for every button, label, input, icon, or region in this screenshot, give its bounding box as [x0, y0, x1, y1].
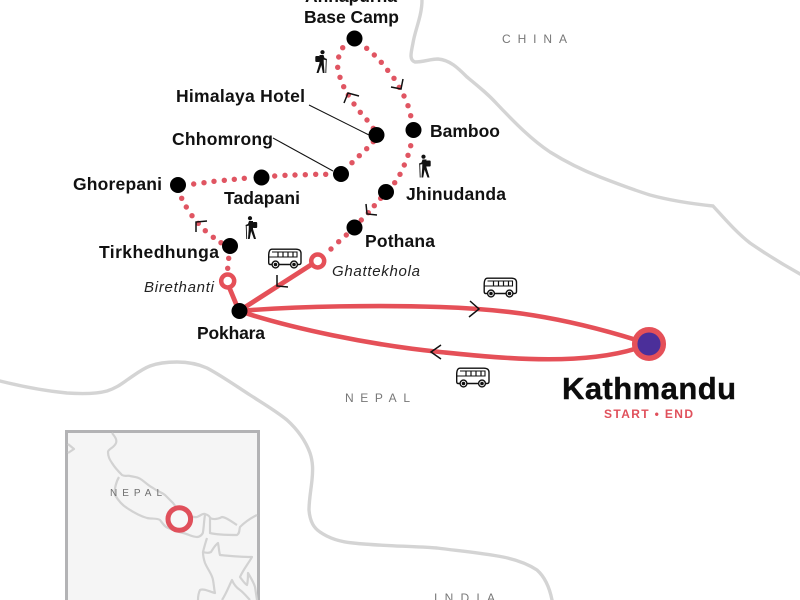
inset label: Nepal: NEPAL — [110, 488, 162, 499]
label: Jhinudanda: Jhinudanda — [406, 184, 506, 204]
label: Ghorepani: Ghorepani — [73, 174, 162, 194]
border: China — [411, 0, 800, 274]
label: Chhomrong: Chhomrong — [172, 129, 273, 149]
inset locator map — [66, 432, 258, 600]
label: Himalaya Hotel: Himalaya Hotel — [176, 86, 305, 106]
icon: bus 2 — [484, 278, 516, 297]
drive route: Pokhara to Kathmandu and back — [227, 261, 649, 359]
icon: hiker 1 — [315, 50, 327, 73]
label: Pokhara: Pokhara — [197, 323, 265, 343]
stop: Ghattekhola — [311, 254, 324, 268]
label: Birethanti: Birethanti — [144, 279, 215, 296]
label: start and end: START • END — [604, 407, 693, 421]
label: Ghattekhola: Ghattekhola — [332, 263, 420, 280]
icon: bus 3 — [457, 368, 489, 387]
icon: bus 1 — [269, 249, 301, 268]
direction arrows — [196, 79, 479, 359]
leader line: Chhomrong — [273, 138, 333, 171]
country label: China: CHINA — [502, 32, 567, 46]
label: Annapurna Base Camp: Base Camp — [304, 7, 399, 27]
country label: Nepal: NEPAL — [345, 391, 410, 405]
border: Nepal-India — [0, 362, 552, 600]
trek route: dotted path — [182, 48, 411, 268]
label: Pothana: Pothana — [365, 231, 435, 251]
leader line: Himalaya Hotel — [309, 105, 369, 135]
label: Bamboo: Bamboo — [430, 121, 500, 141]
stop: Kathmandu — [635, 330, 663, 358]
label: Kathmandu: Kathmandu — [562, 371, 736, 406]
label: Tadapani: Tadapani — [224, 188, 300, 208]
label: Tirkhedhunga: Tirkhedhunga — [99, 242, 219, 262]
stops: trek waypoints — [170, 30, 422, 319]
icon: hiker 3 — [246, 216, 257, 239]
stop: Birethanti — [221, 274, 234, 288]
icon: hiker 2 — [419, 155, 431, 178]
inset marker — [168, 508, 191, 530]
